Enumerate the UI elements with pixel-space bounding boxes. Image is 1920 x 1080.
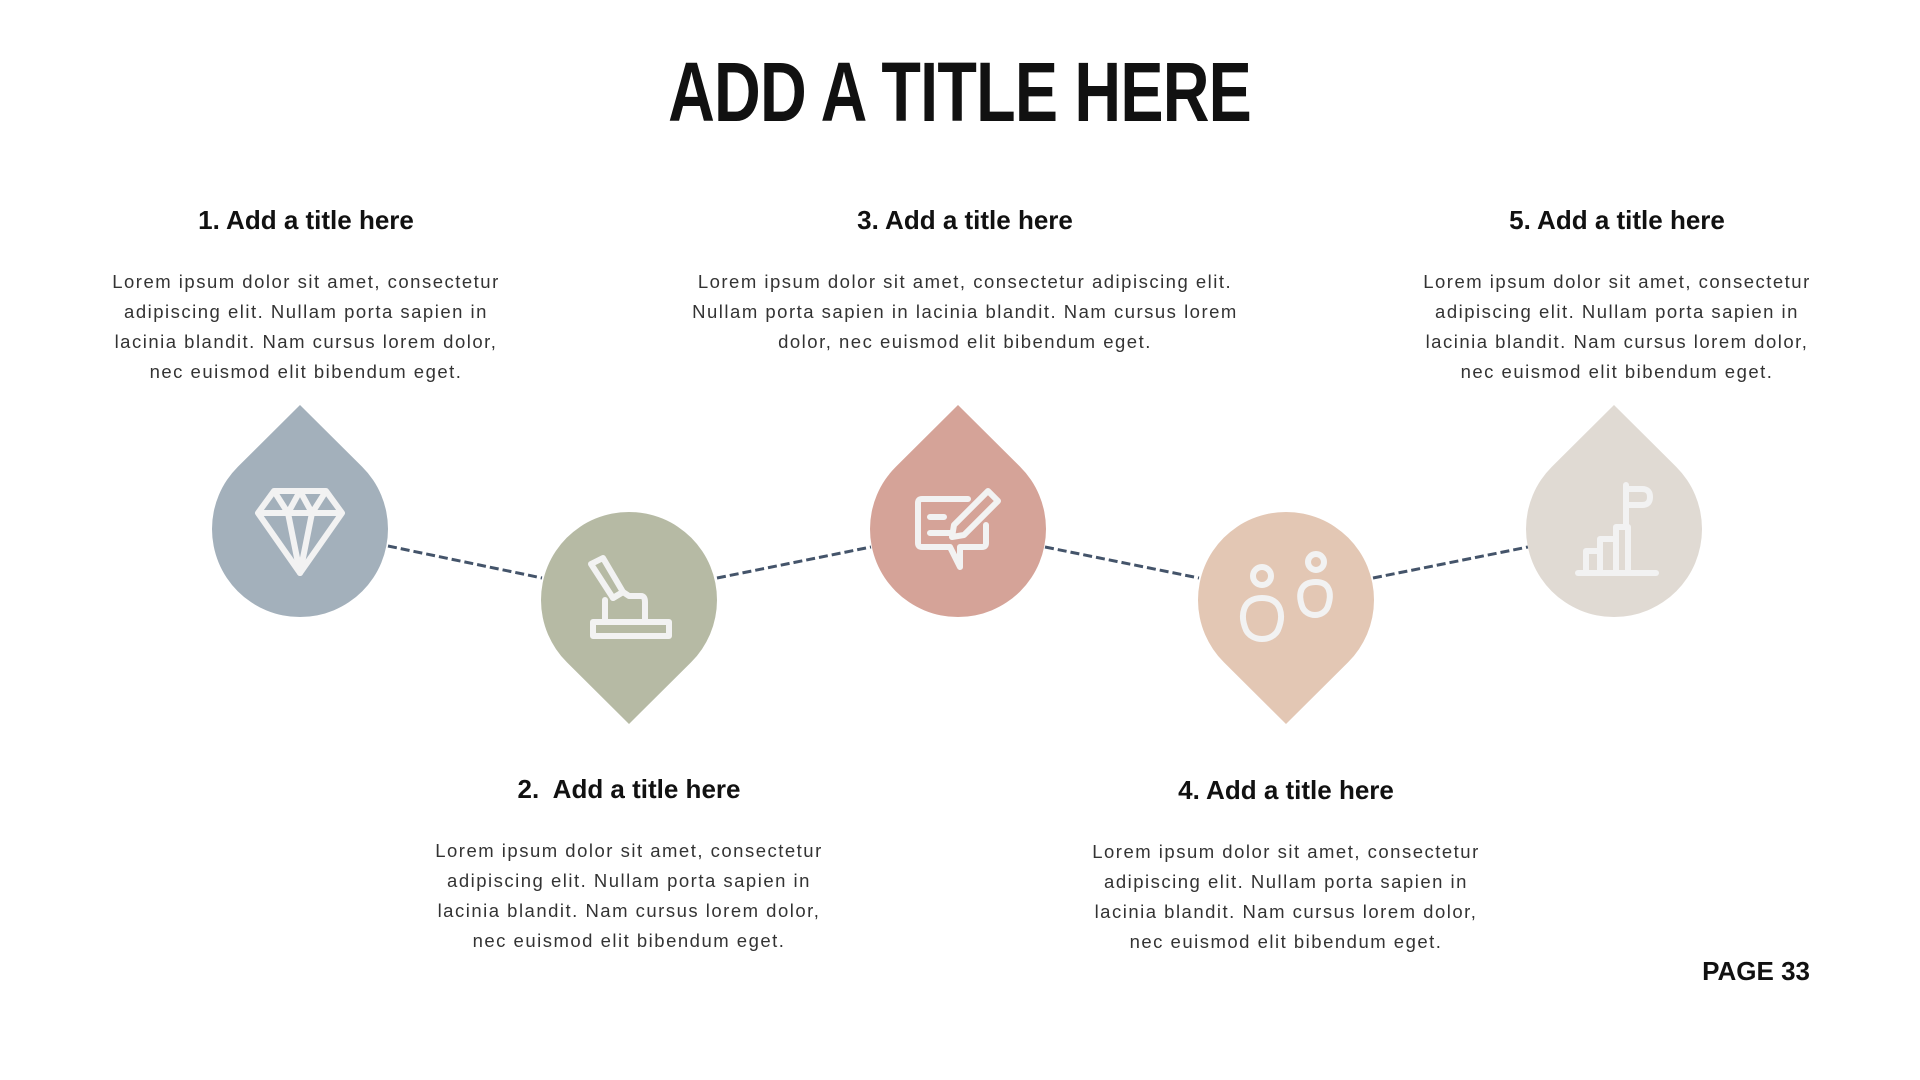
page number: PAGE 33: [1702, 956, 1810, 986]
block 2: lacinia blandit. Nam cursus lorem dolor,: [438, 900, 820, 921]
block 1: nec euismod elit bibendum eget.: [150, 361, 462, 382]
block 1: adipiscing elit. Nullam porta sapien in: [124, 301, 488, 322]
block 1: 1. Add a title here: [198, 205, 414, 235]
block 4: [1092, 775, 1480, 952]
block 4: 4. Add a title here: [1178, 775, 1394, 805]
block 3: dolor, nec euismod elit bibendum eget.: [778, 331, 1152, 352]
block 1: Lorem ipsum dolor sit amet, consectetur: [112, 271, 500, 292]
block 1: [112, 205, 500, 382]
block 5: nec euismod elit bibendum eget.: [1461, 361, 1773, 382]
title: ADD A TITLE HERE: [669, 45, 1251, 139]
block 5: 5. Add a title here: [1509, 205, 1725, 235]
block 2: nec euismod elit bibendum eget.: [473, 930, 785, 951]
drop 2: stamp: [541, 512, 717, 724]
drop 5: growth chart flag: [1526, 405, 1702, 617]
block 3: Lorem ipsum dolor sit amet, consectetur adipiscing elit.: [698, 271, 1232, 292]
drop 3: edit message: [870, 405, 1046, 617]
block 3: 3. Add a title here: [857, 205, 1073, 235]
drop 4: people: [1198, 512, 1374, 724]
block 2: [435, 774, 823, 951]
block 3: Nullam porta sapien in lacinia blandit. Nam cursus lorem: [692, 301, 1238, 322]
block 4: lacinia blandit. Nam cursus lorem dolor,: [1095, 901, 1477, 922]
block 5: [1423, 205, 1811, 382]
drop 1: diamond: [212, 405, 388, 617]
block 5: Lorem ipsum dolor sit amet, consectetur: [1423, 271, 1811, 292]
block 2: adipiscing elit. Nullam porta sapien in: [447, 870, 811, 891]
block 5: adipiscing elit. Nullam porta sapien in: [1435, 301, 1799, 322]
block 2: Lorem ipsum dolor sit amet, consectetur: [435, 840, 823, 861]
block 4: adipiscing elit. Nullam porta sapien in: [1104, 871, 1468, 892]
block 2: 2. Add a title here: [518, 774, 740, 804]
block 3: [692, 205, 1238, 352]
block 4: Lorem ipsum dolor sit amet, consectetur: [1092, 841, 1480, 862]
block 1: lacinia blandit. Nam cursus lorem dolor,: [115, 331, 497, 352]
block 5: lacinia blandit. Nam cursus lorem dolor,: [1426, 331, 1808, 352]
block 4: nec euismod elit bibendum eget.: [1130, 931, 1442, 952]
dashed connectors: [388, 546, 1528, 578]
